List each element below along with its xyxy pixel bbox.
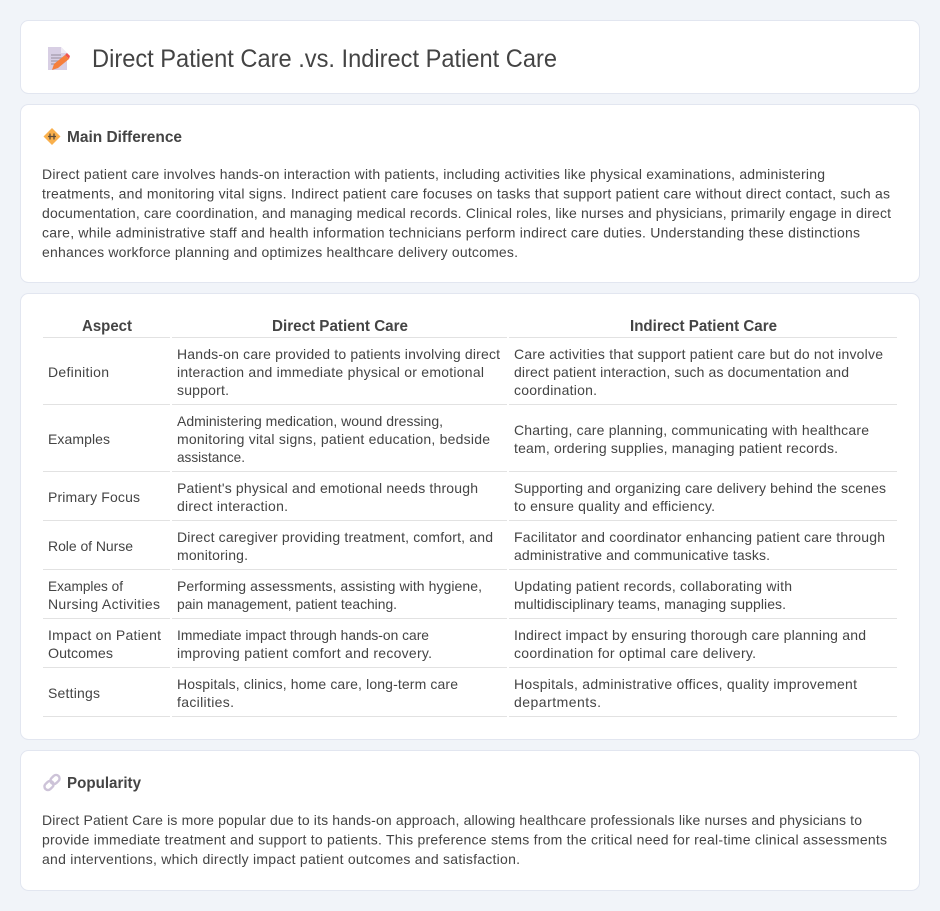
row: role of nurse: Facilitator and coordinator enhancing patient care through bbox=[514, 529, 885, 545]
row: impact on patient outcomes bbox=[48, 627, 866, 661]
row: impact on patient outcomes: Impact on Patient bbox=[48, 627, 161, 643]
row: role of nurse: Direct caregiver providing treatment, comfort, and bbox=[177, 529, 493, 545]
row: settings: departments. bbox=[514, 694, 601, 710]
table header: Aspect bbox=[82, 318, 133, 335]
icon: document with pencil bbox=[48, 47, 70, 70]
row: role of nurse bbox=[48, 529, 885, 563]
row: definition: coordination. bbox=[514, 382, 597, 398]
row: impact on patient outcomes: coordination for optimal care delivery. bbox=[514, 645, 756, 661]
row: impact on patient outcomes: improving patient comfort and recovery. bbox=[177, 645, 432, 661]
panel: popularity bbox=[20, 750, 920, 890]
row: examples of nursing activities bbox=[48, 578, 792, 612]
row: examples of nursing activities: Updating patient records, collaborating with bbox=[514, 578, 792, 594]
panel: main difference bbox=[20, 104, 920, 282]
row: definition: Care activities that support patient care but do not involve bbox=[514, 346, 883, 362]
row: primary focus: Patient's physical and emotional needs through bbox=[177, 480, 478, 496]
row: examples: monitoring vital signs, patient education, bedside bbox=[177, 431, 490, 447]
text block: main difference: care, while administrative staff and health information technicians perform indirect care duties. Understanding these distinctions bbox=[42, 224, 860, 240]
row: examples: Administering medication, wound dressing, bbox=[177, 413, 443, 429]
row: examples: Examples bbox=[48, 431, 110, 447]
text block: main difference: Direct patient care involves hands-on interaction with patients, including activities like physical examinations, administering bbox=[42, 166, 825, 182]
row: settings bbox=[48, 676, 857, 710]
row: examples of nursing activities: multidisciplinary teams, managing supplies. bbox=[514, 596, 786, 612]
panel: header bbox=[20, 20, 920, 94]
row: primary focus bbox=[48, 480, 886, 514]
row: examples of nursing activities: Performing assessments, assisting with hygiene, bbox=[177, 578, 482, 594]
text block: main difference: enhances workforce planning and optimizes healthcare delivery outcomes. bbox=[42, 244, 518, 260]
row: role of nurse: administrative and communicative tasks. bbox=[514, 547, 770, 563]
row: examples of nursing activities: pain management, patient teaching. bbox=[177, 596, 397, 612]
row: examples: assistance. bbox=[177, 449, 245, 465]
text block: main difference: treatments, and monitoring vital signs. Indirect patient care focuses on tasks that support patient care without direct contact, such as bbox=[42, 186, 890, 202]
row: settings: facilities. bbox=[177, 694, 234, 710]
row: examples: Charting, care planning, communicating with healthcare bbox=[514, 422, 869, 438]
icon: warning diamond bbox=[44, 128, 60, 145]
row: examples: team, ordering supplies, managing patient records. bbox=[514, 440, 838, 456]
text block: main difference: documentation, care coordination, and managing medical records. Clinical roles, like nurses and physicians, primarily engage in direct bbox=[42, 205, 891, 221]
row: examples of nursing activities: Nursing Activities bbox=[48, 596, 160, 612]
text block: popularity: and interventions, which directly impact patient outcomes and satisfaction. bbox=[42, 851, 520, 867]
row: definition: interaction and immediate physical or emotional bbox=[177, 364, 484, 380]
text block: main difference bbox=[42, 166, 891, 260]
heading: main difference: Main Difference bbox=[67, 129, 182, 146]
title: Direct Patient Care .vs. Indirect Patient Care bbox=[92, 45, 557, 73]
row: role of nurse: Role of Nurse bbox=[48, 538, 133, 554]
panel: comparison table bbox=[20, 294, 920, 740]
text block: popularity bbox=[42, 812, 887, 867]
row: settings: Hospitals, administrative offices, quality improvement bbox=[514, 676, 857, 692]
row: primary focus: to ensure quality and efficiency. bbox=[514, 498, 715, 514]
table header: Direct Patient Care bbox=[272, 318, 408, 335]
text block: popularity: provide immediate treatment and support to patients. This preference stems from the critical need for real-time clinical assessments bbox=[42, 832, 887, 848]
row: definition: support. bbox=[177, 382, 229, 398]
row: primary focus: Primary Focus bbox=[48, 489, 140, 505]
row: primary focus: direct interaction. bbox=[177, 498, 288, 514]
row: role of nurse: monitoring. bbox=[177, 547, 248, 563]
row: settings: Settings bbox=[48, 685, 100, 701]
row: impact on patient outcomes: Indirect impact by ensuring thorough care planning and bbox=[514, 627, 866, 643]
row: definition: Hands-on care provided to patients involving direct bbox=[177, 346, 500, 362]
row: definition: Definition bbox=[48, 364, 109, 380]
row: examples bbox=[48, 413, 869, 465]
row: impact on patient outcomes: Immediate impact through hands-on care bbox=[177, 627, 429, 643]
row: primary focus: Supporting and organizing care delivery behind the scenes bbox=[514, 480, 886, 496]
text block: popularity: Direct Patient Care is more popular due to its hands-on approach, allowing healthcare professionals like nurses and physicians to bbox=[42, 812, 862, 828]
heading: popularity: Popularity bbox=[67, 775, 141, 792]
table header: Indirect Patient Care bbox=[630, 318, 777, 335]
row: settings: Hospitals, clinics, home care, long-term care bbox=[177, 676, 458, 692]
row: definition: direct patient interaction, such as documentation and bbox=[514, 364, 849, 380]
row: definition bbox=[48, 346, 883, 398]
row: examples of nursing activities: Examples of bbox=[48, 578, 123, 594]
icon: chain link bbox=[43, 773, 61, 792]
row: impact on patient outcomes: Outcomes bbox=[48, 645, 113, 661]
table header bbox=[82, 318, 777, 335]
